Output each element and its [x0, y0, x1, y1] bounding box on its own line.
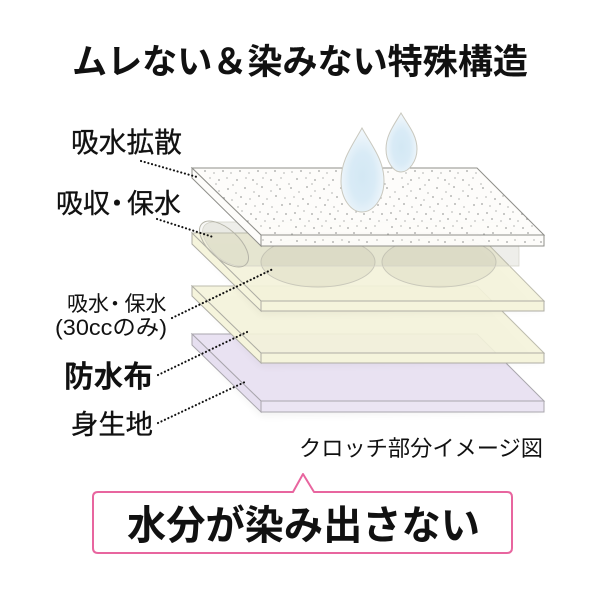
label: 吸収・保水: 吸収	[56, 189, 110, 219]
label: 吸水・保水 (30ccのみ): (30ccのみ)	[55, 315, 167, 340]
icon: large water drop	[341, 128, 384, 212]
diagram: layered crotch structure	[192, 113, 544, 416]
leader lines	[141, 161, 273, 423]
layer: top sheet with dots	[192, 168, 544, 246]
layer: absorbent sheet (yellow)	[192, 233, 544, 315]
caption: クロッチ部分イメージ図	[299, 436, 543, 461]
callout: 水分が染み出さない	[127, 504, 480, 548]
layer: waterproof fabric (yellow)	[192, 286, 544, 367]
layer: back fabric (purple)	[192, 334, 544, 416]
label: 吸収・保水: 保水	[127, 189, 181, 219]
icon: small water drop	[386, 113, 417, 172]
label: 防水布: 防水布	[64, 361, 153, 394]
label: 吸収・保水: ・	[104, 189, 130, 219]
label: 吸水拡散: 吸水拡散	[71, 127, 182, 158]
label: 吸水・保水 (30ccのみ): ・	[104, 293, 126, 316]
absorbent roll with pads	[192, 213, 519, 287]
callout	[93, 474, 512, 553]
label: 吸水・保水 (30ccのみ): 保水	[124, 293, 166, 316]
label: 吸水・保水 (30ccのみ): 吸水	[67, 293, 109, 316]
label: 身生地: 身生地	[71, 410, 153, 440]
label: 吸水・保水 (30ccのみ)	[55, 293, 167, 340]
title: ムレない＆染みない特殊構造	[72, 43, 528, 82]
